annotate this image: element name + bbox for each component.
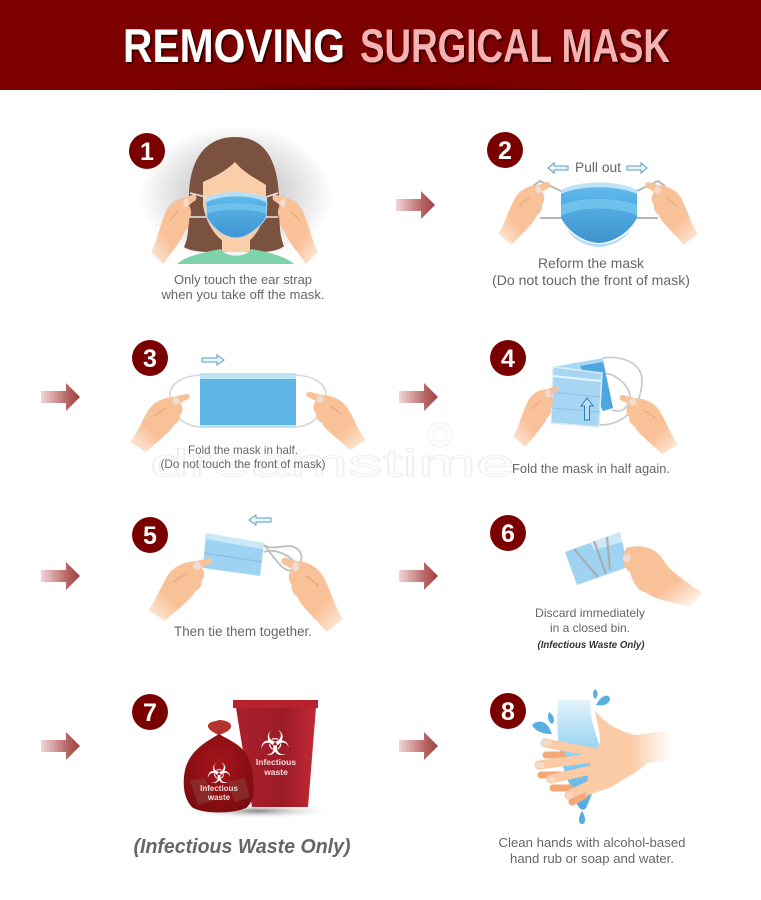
illustration: tying the loops [148,533,343,632]
caption 2: Reform the mask [538,255,645,271]
pull out arrows [548,163,647,173]
red bag [184,720,254,812]
red bin: Infectious [256,757,296,767]
caption 2: (Do not touch the front of mask) [492,272,690,288]
title: REMOVING [125,21,347,74]
illustration: woman with mask [139,125,333,264]
red bin [233,700,318,807]
number badge 3 [132,340,168,376]
number badge 5 [132,517,168,553]
illustration: mask folded in half [513,357,678,454]
caption 2 [492,255,690,288]
flow arrows [41,191,438,760]
illustration: hands pulling mask [498,181,698,247]
number badge 6: 6 [501,520,515,548]
caption 1: when you take off the mask. [160,287,324,302]
number badge 4 [490,340,526,376]
caption 7: (Infectious Waste Only) [134,836,351,858]
caption 3 [160,444,326,471]
number badge 8: 8 [501,698,515,726]
number badge 3: 3 [143,345,157,373]
caption 8: Clean hands with alcohol-based [498,835,686,850]
red bin: waste [263,767,288,777]
caption 6: (Infectious Waste Only) [538,640,645,651]
caption 4: Fold the mask in half again. [512,461,670,476]
title: SURGICAL MASK [362,21,672,74]
number badge 1 [129,133,165,169]
caption 3: Fold the mask in half. [188,444,298,457]
watermark: dreamstime [150,443,515,485]
panel: step 8 [490,689,686,866]
title: REMOVING [123,19,345,72]
red bin: ☣ [260,724,290,764]
watermark [150,423,515,485]
caption 8: hand rub or soap and water. [510,851,674,866]
panel: step 3 [130,340,366,471]
caption 6 [535,606,645,651]
pull out label: Pull out [575,160,621,175]
panel: step 7 [132,694,351,858]
title: SURGICAL MASK [360,19,670,72]
number badge 2: 2 [498,137,512,165]
number badge 7 [132,694,168,730]
red bag: Infectious [200,784,238,793]
number badge 7: 7 [143,699,157,727]
caption 3: (Do not touch the front of mask) [160,458,326,471]
header banner [0,0,761,90]
title [123,19,672,74]
caption 1 [160,272,324,302]
panel: step 2 [487,132,698,288]
panel: step 1 [129,125,333,302]
panel: step 6 [490,515,702,651]
direction arrow [202,355,224,365]
caption 8 [498,835,686,866]
number badge 8 [490,693,526,729]
red bag: waste [207,793,231,802]
illustration: open mask held by hands [130,373,366,452]
illustration: washing hands under water [532,689,672,824]
red bag: ☣ [206,757,232,790]
number badge 4: 4 [501,345,515,373]
number badge 1: 1 [140,138,154,166]
illustration: waste bin and bag [180,700,336,819]
direction arrow [249,515,271,525]
caption 1: Only touch the ear strap [174,272,312,287]
number badge 6 [490,515,526,551]
panel: step 4 [490,340,678,476]
caption 5: Then tie them together. [174,624,312,639]
fold arrow up [581,398,593,420]
panel: step 5 [132,515,343,639]
caption 6: Discard immediately [535,606,645,620]
illustration: discarding mask [565,532,702,607]
number badge 2 [487,132,523,168]
caption 6: in a closed bin. [550,621,630,635]
number badge 5: 5 [143,522,157,550]
